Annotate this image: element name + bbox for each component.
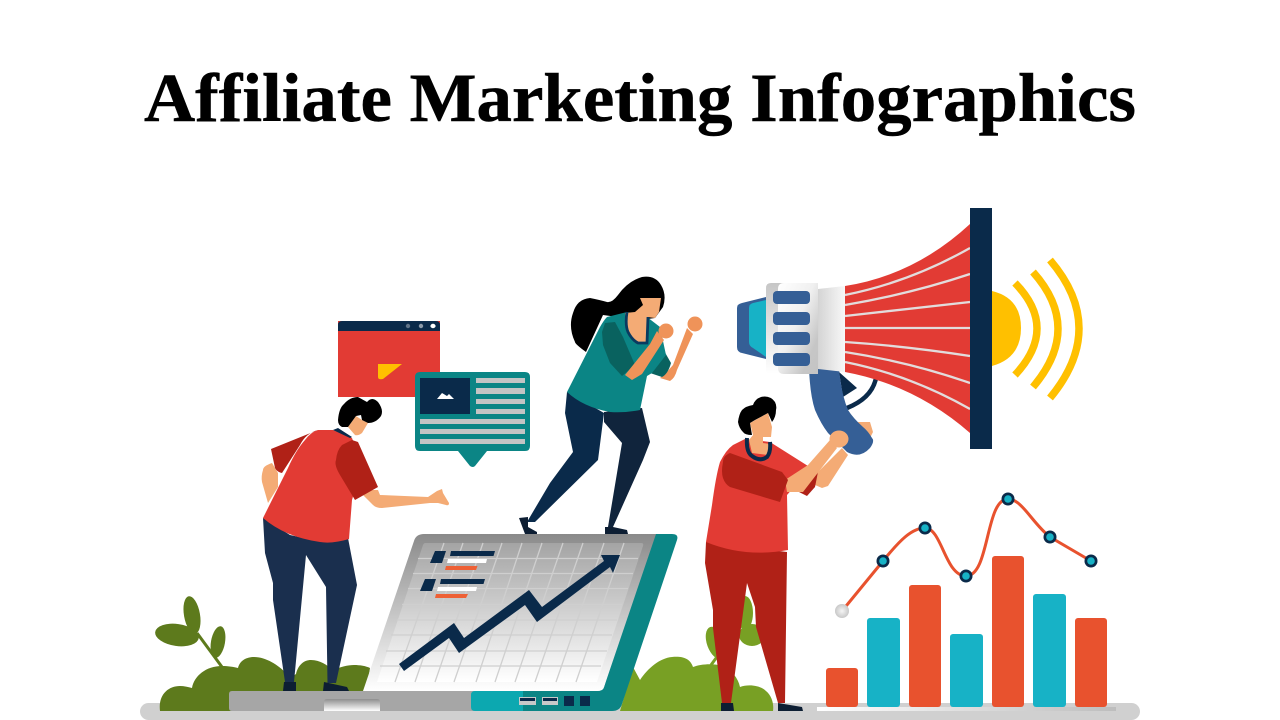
shoes — [283, 682, 349, 691]
bar chart — [826, 556, 1107, 707]
torso sleeve — [722, 453, 788, 502]
laptop — [229, 534, 677, 711]
marker centers — [879, 495, 1095, 580]
back cap — [737, 297, 766, 359]
back sleeve — [271, 430, 318, 473]
buttons — [773, 291, 810, 366]
back arm — [262, 463, 278, 503]
window title bar — [338, 321, 440, 331]
trigger ring — [847, 378, 876, 408]
chart baseline — [817, 707, 1116, 711]
line chart — [835, 492, 1098, 618]
hair — [338, 397, 382, 427]
collar — [333, 428, 352, 438]
laptop keys — [519, 696, 590, 706]
shoes — [721, 703, 803, 711]
hair — [738, 397, 776, 435]
window dots — [406, 324, 436, 328]
laptop screen — [363, 534, 656, 691]
neck and face — [625, 298, 661, 343]
sound dome — [992, 291, 1021, 366]
body panel — [778, 283, 818, 374]
front panel — [970, 208, 992, 449]
laptop base teal section — [471, 691, 523, 711]
back arm — [660, 316, 702, 381]
cyan cap — [749, 300, 766, 357]
rising arrow — [399, 555, 620, 671]
plant: left bush — [154, 595, 370, 711]
shoes — [519, 517, 628, 534]
data markers — [876, 492, 1098, 582]
far sleeve — [795, 472, 818, 496]
ground strip — [140, 703, 1140, 720]
far arm of man holding megaphone — [815, 422, 873, 488]
screen list items — [420, 551, 495, 598]
trackpad — [324, 699, 380, 711]
bubble mountain icon — [437, 393, 454, 399]
megaphone — [737, 208, 1079, 455]
back leg — [604, 408, 650, 527]
front sleeve — [336, 440, 378, 500]
collar — [818, 286, 845, 372]
sound waves — [1015, 260, 1079, 398]
body left band — [766, 283, 790, 374]
figure: man in red holding megaphone — [705, 397, 848, 711]
figure: man in red leaning — [262, 397, 449, 691]
front leg — [527, 392, 604, 522]
neck and face — [749, 413, 772, 455]
trousers — [263, 518, 357, 683]
hair — [571, 277, 665, 352]
chat bubble — [415, 372, 530, 467]
near arm and hand — [785, 430, 848, 492]
play icon — [378, 364, 402, 379]
torso — [567, 312, 666, 412]
screen grid — [377, 543, 643, 682]
laptop teal shell — [523, 534, 677, 711]
plant: right bush — [620, 596, 773, 711]
horn ribs — [845, 248, 970, 409]
bubble text lines — [420, 378, 525, 444]
video window — [338, 321, 440, 397]
torso — [706, 439, 808, 553]
title: Affiliate Marketing Infographics — [144, 60, 1136, 136]
torso — [263, 430, 362, 543]
trousers — [705, 542, 787, 703]
extended arm — [358, 489, 449, 508]
bubble image — [420, 378, 470, 414]
collar — [747, 438, 770, 459]
handle — [809, 368, 873, 455]
horn — [845, 224, 970, 433]
front arm — [625, 324, 674, 380]
neck and face — [348, 416, 368, 435]
figure: woman in teal walking — [519, 277, 702, 534]
trigger wedge — [839, 372, 857, 397]
neckline — [626, 312, 648, 343]
start marker — [835, 604, 849, 618]
sleeve — [602, 322, 635, 376]
laptop base — [229, 691, 476, 711]
far sleeve — [650, 335, 671, 377]
